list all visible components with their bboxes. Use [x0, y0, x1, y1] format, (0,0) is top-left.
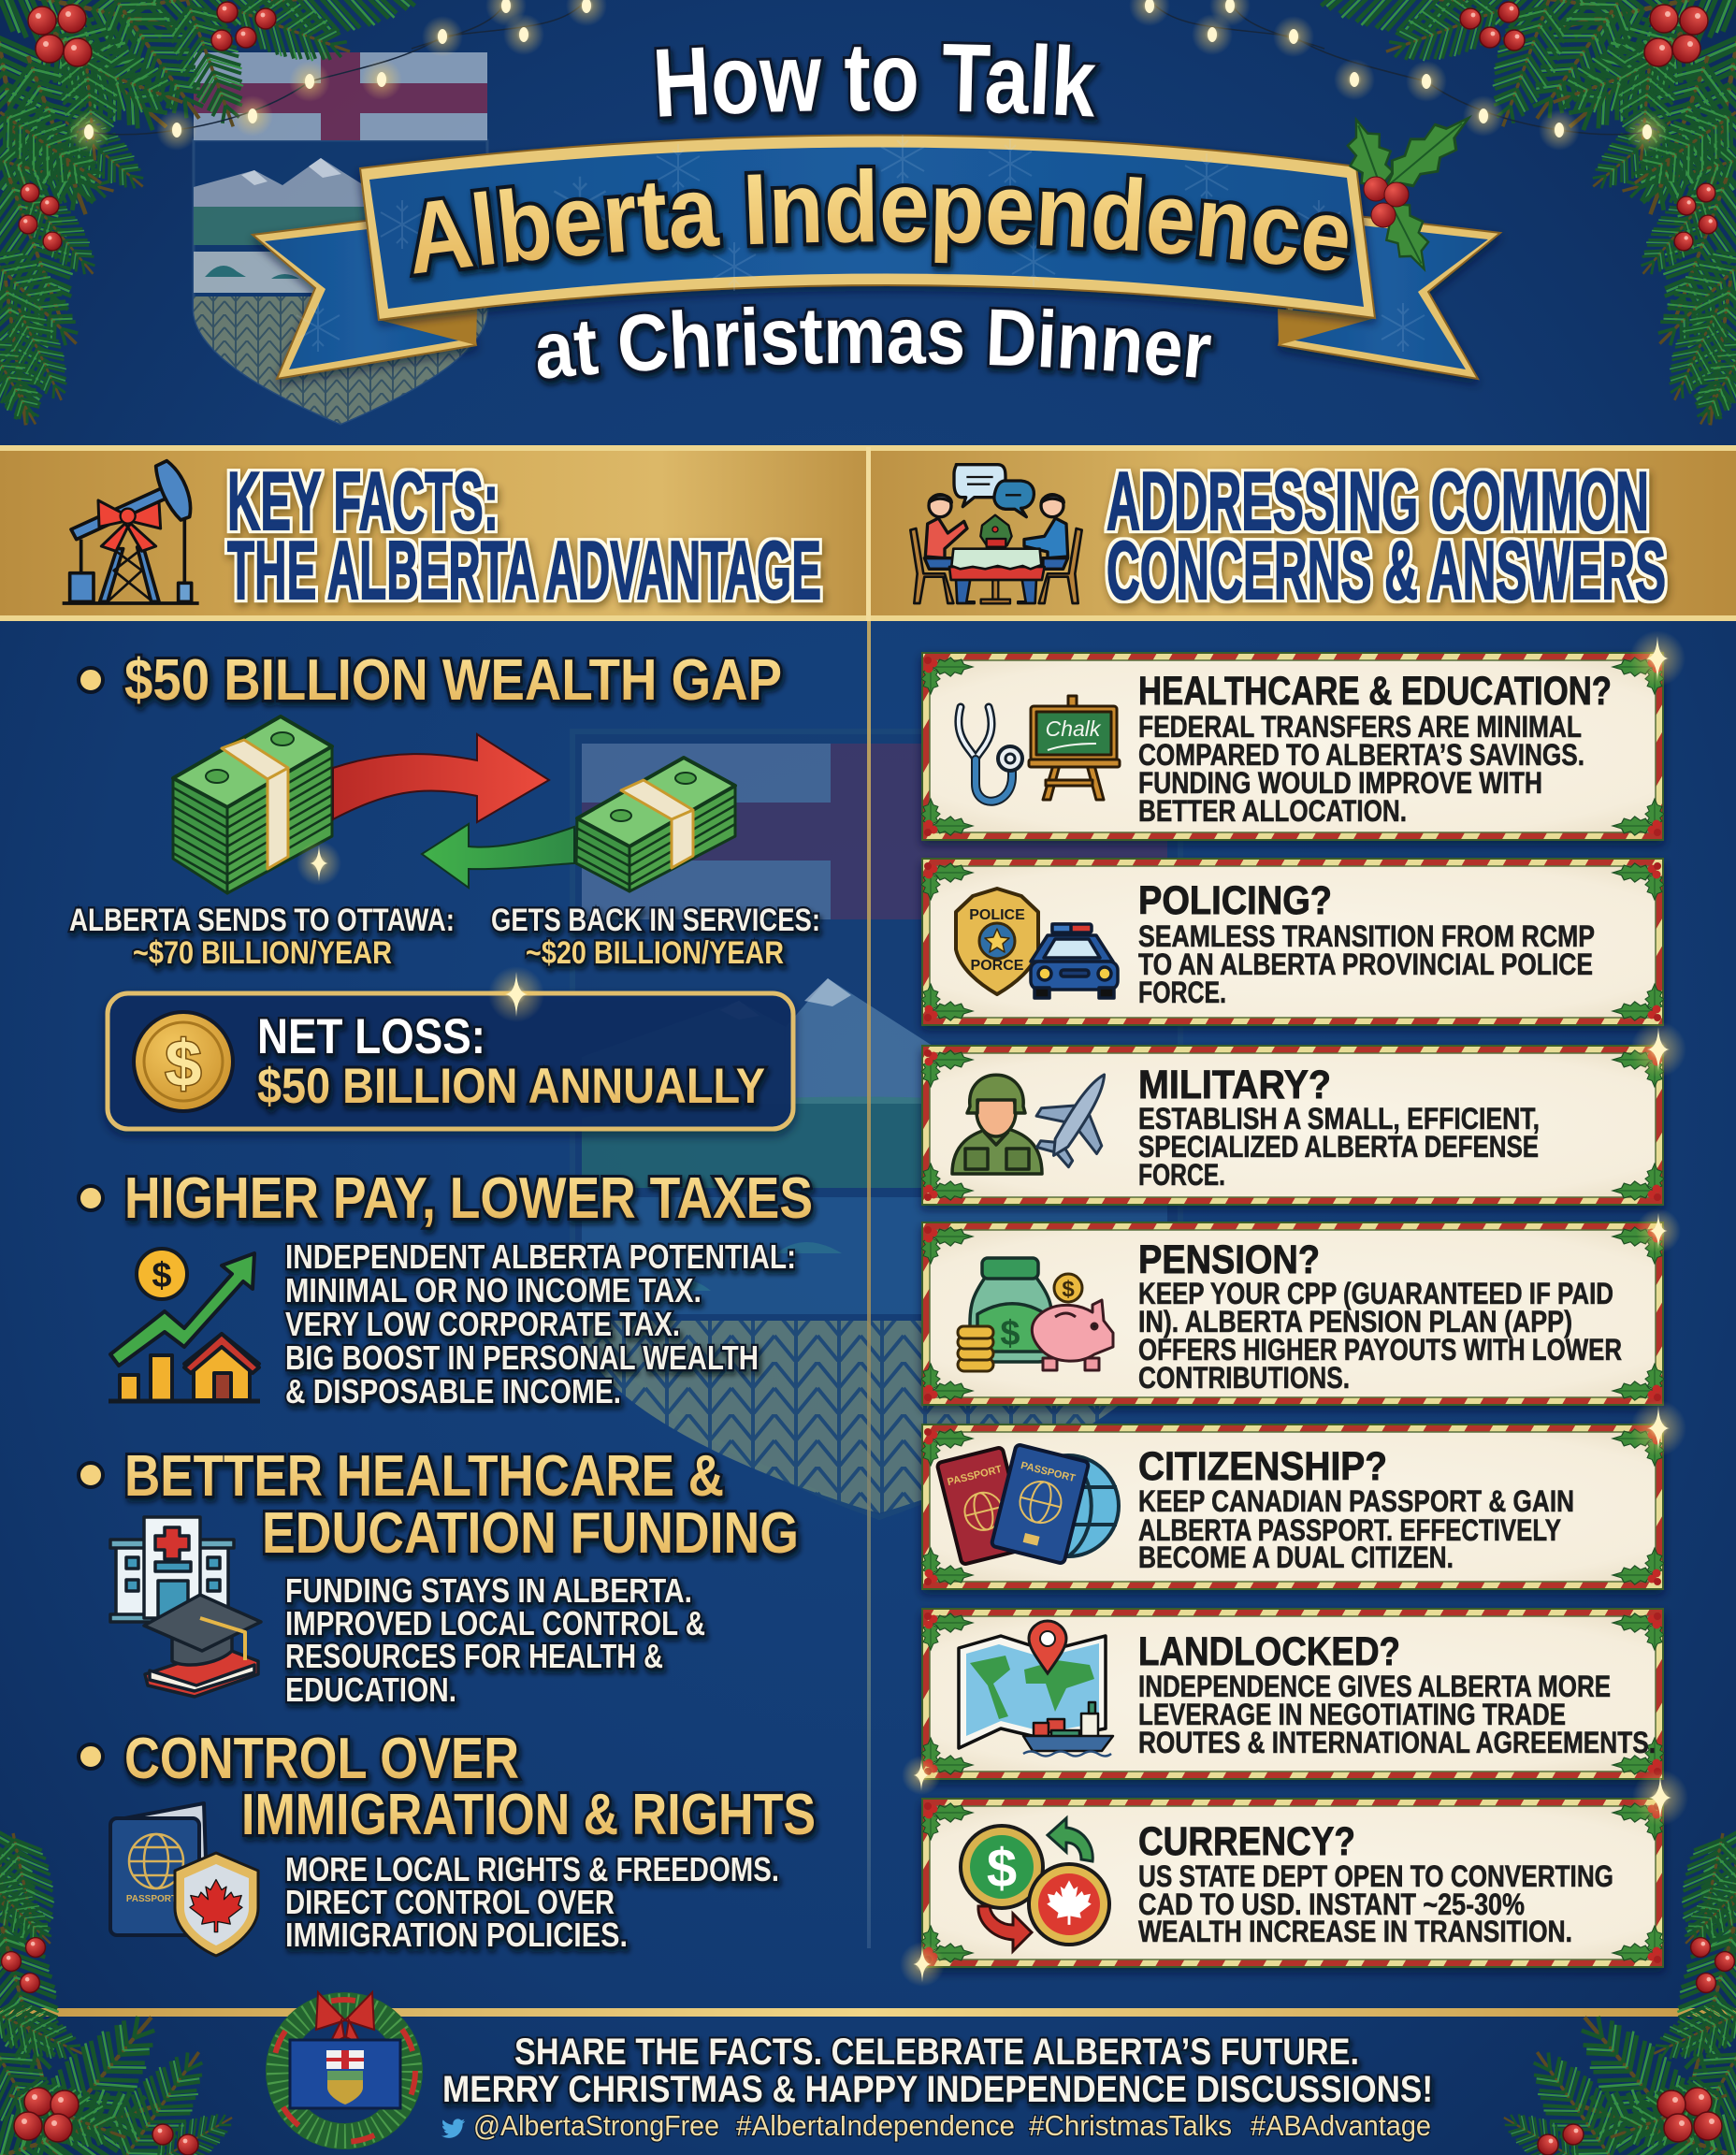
card heading: POLICING? [1138, 878, 1332, 923]
card text: LEVERAGE IN NEGOTIATING TRADE [1138, 1698, 1566, 1731]
card heading: MILITARY? [1138, 1063, 1331, 1107]
heading: wealth gap: $50 BILLION WEALTH GAP [124, 648, 782, 713]
title: Alberta Independence: Alberta Independence [408, 165, 1357, 284]
footer gold rule [0, 2008, 1736, 2017]
icon: police badge: PORCE [971, 958, 1024, 974]
card heading: LANDLOCKED? [1138, 1629, 1400, 1674]
title: at Christmas Dinner: at Christmas Dinner [534, 303, 1219, 388]
icon: US dollar coin: $ [987, 1838, 1017, 1899]
label: gets back in services: ~$20 BILLION/YEAR [526, 935, 784, 971]
flag [290, 2040, 400, 2108]
text: tax benefits: INDEPENDENT ALBERTA POTENTIAL: [285, 1237, 796, 1276]
icon: fighter jet [1022, 1056, 1135, 1176]
card: policing [921, 859, 1664, 1025]
ribbon tail left [253, 210, 476, 379]
text: funding: RESOURCES FOR HEALTH & [285, 1637, 663, 1675]
icon: soldier [952, 1075, 1042, 1174]
icon: dollar coin: $ [166, 1027, 201, 1100]
heading: healthcare funding [124, 1444, 799, 1566]
card text: ALBERTA PASSPORT. EFFECTIVELY [1138, 1513, 1561, 1547]
card heading: HEALTHCARE & EDUCATION? [1138, 669, 1612, 714]
pine garland: bottom right [1494, 1821, 1736, 2155]
icon: growth chart and house [108, 1249, 260, 1401]
card: citizenship [921, 1425, 1664, 1589]
Alberta crest watermark: header [187, 47, 494, 425]
section: healthcare and education [79, 1444, 799, 1709]
text: tax benefits: VERY LOW CORPORATE TAX. [285, 1305, 680, 1343]
text: rights: DIRECT CONTROL OVER [285, 1883, 615, 1921]
card text [1138, 1277, 1622, 1395]
social handles and hashtags: #ABAdvantage [1251, 2109, 1431, 2142]
string lights: top right [1129, 0, 1668, 152]
heading: healthcare funding: BETTER HEALTHCARE & [124, 1444, 724, 1509]
card text: US STATE DEPT OPEN TO CONVERTING [1138, 1859, 1613, 1893]
card text: KEEP YOUR CPP (GUARANTEED IF PAID [1138, 1277, 1613, 1310]
icon: stethoscope [959, 707, 1022, 802]
icon: US dollar coin [961, 1826, 1043, 1908]
card: military [921, 1046, 1664, 1205]
text: rights: MORE LOCAL RIGHTS & FREEDOMS. [285, 1850, 779, 1888]
card text [1138, 1859, 1613, 1948]
card text [1138, 1484, 1574, 1574]
sparkle [488, 966, 544, 1022]
icon: red passport [937, 1447, 1027, 1565]
icon: piggy bank [1032, 1300, 1113, 1370]
card text [1138, 710, 1584, 828]
pine garland: top right [1299, 0, 1736, 436]
icon: dollar coin [134, 1012, 233, 1111]
card text: FORCE. [1138, 976, 1226, 1009]
text: tax benefits: BIG BOOST IN PERSONAL WEALTH [285, 1338, 759, 1377]
arrow: red to Ottawa [333, 734, 549, 822]
card text: WEALTH INCREASE IN TRANSITION. [1138, 1915, 1572, 1948]
icon: coin [1054, 1274, 1082, 1302]
ribbon tail right [1279, 210, 1500, 379]
card: healthcare and education [921, 653, 1664, 840]
card heading: CITIZENSHIP? [1138, 1444, 1387, 1489]
card text: FEDERAL TRANSFERS ARE MINIMAL [1138, 710, 1582, 744]
icon: map pin [1029, 1621, 1066, 1673]
card text: BECOME A DUAL CITIZEN. [1138, 1540, 1454, 1574]
text: funding: EDUCATION. [285, 1670, 456, 1709]
card text: COMPARED TO ALBERTA’S SAVINGS. [1138, 738, 1584, 772]
card text: CAD TO USD. INSTANT ~25-30% [1138, 1887, 1525, 1921]
footer message: SHARE THE FACTS. CELEBRATE ALBERTA’S FUTURE. [514, 2032, 1359, 2073]
icon: holly on ribbon [1336, 102, 1482, 279]
card text: FUNDING WOULD IMPROVE WITH [1138, 766, 1542, 800]
card text: ESTABLISH A SMALL, EFFICIENT, [1138, 1102, 1540, 1135]
card: currency [921, 1799, 1664, 1967]
card text: FORCE. [1138, 1158, 1225, 1192]
icon: red passport: PASSPORT [947, 1464, 1004, 1488]
label: gets back in services: GETS BACK IN SERVICES: [491, 903, 820, 938]
icon: small money stack [576, 758, 735, 891]
icon: world map [959, 1636, 1106, 1748]
footer message [442, 2032, 1433, 2110]
label: sends to Ottawa [69, 903, 455, 971]
bullet [79, 1744, 103, 1769]
callout text: $50 BILLION ANNUALLY [257, 1059, 765, 1114]
label: sends to Ottawa: ~$70 BILLION/YEAR [133, 935, 392, 971]
icon: chalkboard [1029, 696, 1120, 800]
label: sends to Ottawa: ALBERTA SENDS TO OTTAWA: [69, 903, 455, 938]
card text: SPECIALIZED ALBERTA DEFENSE [1138, 1130, 1539, 1164]
icon: hospital and graduation cap [110, 1517, 261, 1697]
icon: chalkboard: Chalk [1046, 716, 1102, 741]
panel: concerns and answers column [900, 630, 1688, 1987]
icon: blue passport: PASSPORT [1020, 1460, 1077, 1484]
card text: KEEP CANADIAN PASSPORT & GAIN [1138, 1484, 1574, 1518]
card: landlocked [921, 1609, 1664, 1779]
card text: OFFERS HIGHER PAYOUTS WITH LOWER [1138, 1333, 1622, 1367]
snowflake pattern on ribbon [297, 135, 1425, 352]
social handles and hashtags [473, 2109, 1431, 2142]
card: pension [921, 1222, 1664, 1405]
holly corners [921, 1226, 1664, 1401]
callout: net loss [108, 966, 793, 1129]
text: tax benefits: MINIMAL OR NO INCOME TAX. [285, 1271, 702, 1309]
card text: CONTRIBUTIONS. [1138, 1361, 1350, 1395]
icon: globe [1018, 1455, 1119, 1556]
footer message: MERRY CHRISTMAS & HAPPY INDEPENDENCE DISCUSSIONS! [442, 2069, 1433, 2110]
card text [1138, 1670, 1656, 1759]
icon: police car [1031, 924, 1118, 998]
heading: key facts: KEY FACTS: [227, 455, 499, 547]
heading: higher pay: HIGHER PAY, LOWER TAXES [124, 1166, 813, 1231]
callout text [257, 1009, 765, 1114]
card text [1138, 1102, 1540, 1192]
social handles and hashtags: #ChristmasTalks [1029, 2109, 1232, 2142]
sparkles on cards [900, 630, 1688, 1987]
icon: large money stack [173, 716, 332, 893]
section: wealth gap [69, 648, 820, 1129]
holly corners [921, 862, 1664, 1021]
heading: healthcare funding: EDUCATION FUNDING [262, 1501, 799, 1566]
ribbon banner [253, 135, 1500, 379]
heading: immigration [124, 1727, 816, 1847]
icon: money jar: $ [1000, 1314, 1020, 1353]
panel: key facts column [69, 648, 820, 1956]
section: immigration and rights [79, 1727, 816, 1956]
title: How to Talk: How to Talk [653, 40, 1104, 126]
holly corners [921, 1613, 1664, 1775]
icon: police badge [956, 889, 1038, 994]
card heading: CURRENCY? [1138, 1819, 1355, 1864]
text: rights [285, 1850, 779, 1954]
icon: wreath with Alberta flag [273, 1992, 415, 2142]
arrow: red exchange [978, 1906, 1032, 1951]
icon: twitter bird [441, 2119, 465, 2138]
bow [316, 1992, 374, 2045]
bullet [79, 1463, 103, 1487]
icon: Christmas dinner conversation [910, 465, 1082, 603]
text: tax benefits: & DISPOSABLE INCOME. [285, 1372, 621, 1410]
arrow: green back to Alberta [422, 824, 574, 888]
bullet [79, 668, 103, 692]
icon: blue passport [991, 1444, 1089, 1564]
sparkle [297, 841, 341, 886]
social handles and hashtags: @AlbertaStrongFree [473, 2109, 719, 2142]
card heading: PENSION? [1138, 1237, 1320, 1282]
label: gets back in services [491, 903, 820, 971]
holly corners [921, 1049, 1664, 1201]
icon: coin: $ [1062, 1277, 1075, 1302]
heading: immigration: IMMIGRATION & RIGHTS [241, 1783, 816, 1847]
card text: SEAMLESS TRANSITION FROM RCMP [1138, 919, 1595, 953]
ribbon main band [360, 135, 1375, 320]
string lights: top left [68, 0, 607, 152]
icon: oil pumpjack with bow [63, 461, 199, 603]
heading: immigration: CONTROL OVER [124, 1727, 519, 1791]
Alberta crest watermark: centre [572, 731, 1180, 1517]
icon: coin stack [958, 1326, 993, 1371]
text: funding: FUNDING STAYS IN ALBERTA. [285, 1571, 692, 1610]
section: higher pay [79, 1166, 813, 1410]
bullet [79, 1186, 103, 1210]
icon: money jar [970, 1258, 1052, 1362]
holly corners [921, 1428, 1664, 1585]
icon: cargo ship [1023, 1702, 1113, 1757]
heading: addressing concerns [1107, 455, 1666, 616]
callout text: NET LOSS: [257, 1009, 485, 1064]
card text [1138, 919, 1595, 1009]
heading: key facts [227, 455, 821, 616]
column divider [867, 620, 871, 1948]
text: funding: IMPROVED LOCAL CONTROL & [285, 1604, 705, 1642]
text: tax benefits [285, 1237, 796, 1410]
heading: key facts: THE ALBERTA ADVANTAGE [227, 524, 821, 616]
holly corners [921, 1802, 1664, 1963]
card text: IN). ALBERTA PENSION PLAN (APP) [1138, 1305, 1572, 1338]
icon: Canadian dollar coin [1029, 1864, 1109, 1945]
card text: BETTER ALLOCATION. [1138, 794, 1407, 828]
pine garland: bottom left [0, 1821, 242, 2155]
icon: police badge: POLICE [969, 907, 1025, 923]
card text: INDEPENDENCE GIVES ALBERTA MORE [1138, 1670, 1611, 1703]
icon: passport and shield: PASSPORT [126, 1894, 177, 1904]
panel: gold section header band [0, 445, 1736, 621]
holly corners [921, 657, 1664, 836]
ribbon fold shadows [379, 309, 1375, 345]
text: funding [285, 1571, 705, 1709]
arrow: green exchange [1048, 1818, 1092, 1861]
text: rights: IMMIGRATION POLICIES. [285, 1916, 628, 1954]
social handles and hashtags: #AlbertaIndependence [736, 2109, 1015, 2142]
pine garland: top left [0, 0, 437, 436]
icon: growth chart and house: $ [152, 1256, 172, 1295]
icon: passport and shield [110, 1803, 258, 1956]
card text: TO AN ALBERTA PROVINCIAL POLICE [1138, 947, 1593, 981]
